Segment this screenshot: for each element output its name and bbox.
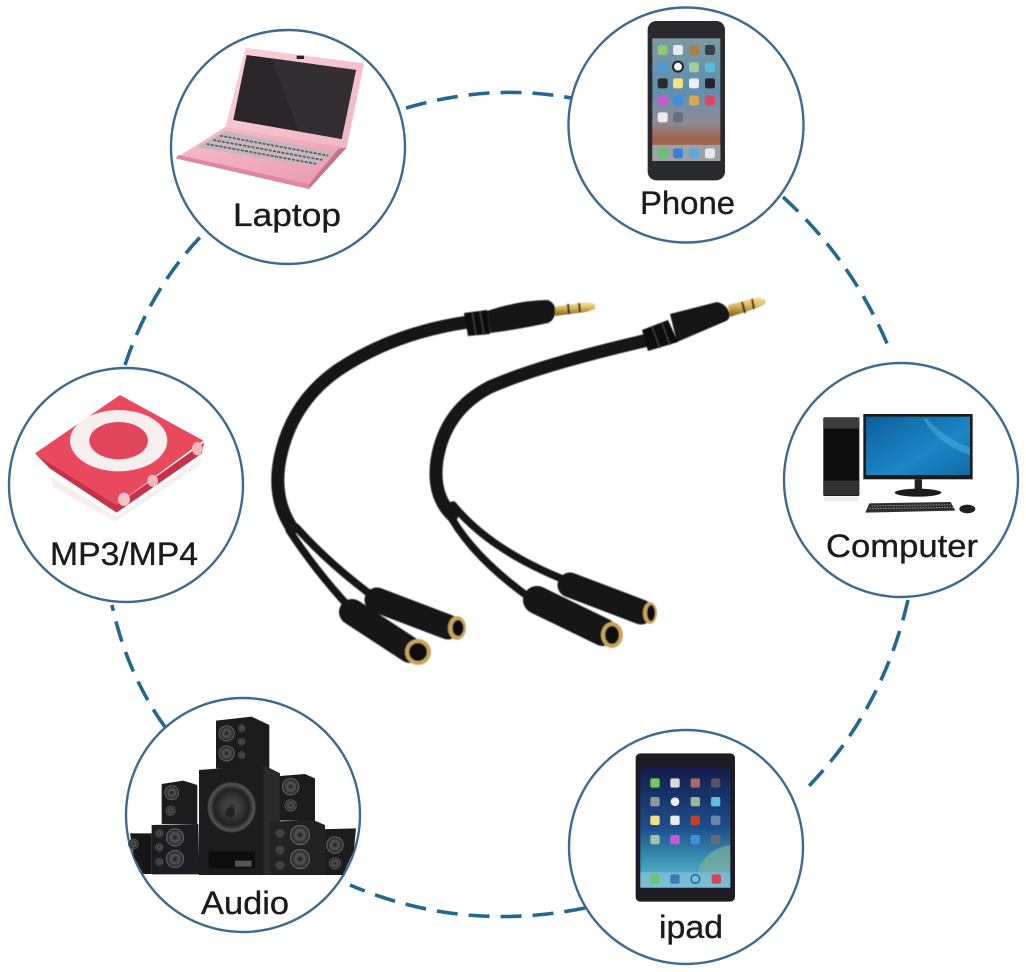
dual jack: upper <box>570 585 657 624</box>
icon: tablet <box>636 753 735 902</box>
3.5mm plug <box>464 300 595 336</box>
3.5mm plug <box>642 297 766 351</box>
label: MP3/MP4: MP3/MP4 <box>50 536 198 572</box>
dual jack: upper <box>377 600 466 640</box>
panel: Phone <box>568 8 804 242</box>
icon: red music player <box>35 395 204 522</box>
icon: desktop computer <box>823 414 975 513</box>
dashed connector ring <box>112 92 908 917</box>
label: ipad: ipad <box>659 909 723 945</box>
icon: smartphone <box>648 21 725 180</box>
panel: Computer <box>784 363 1018 597</box>
label: Laptop: Laptop <box>233 197 341 233</box>
label: Computer: Computer <box>826 528 978 564</box>
label: Audio: Audio <box>201 885 289 921</box>
icon: pink laptop <box>176 48 364 189</box>
label: Phone: Phone <box>640 185 735 221</box>
splitter cable: left <box>278 300 595 665</box>
dual jack: lower <box>352 612 431 665</box>
panel: ipad <box>569 730 803 964</box>
dual jack: lower <box>537 600 623 648</box>
panel: MP3/MP4 <box>9 368 243 602</box>
panel: Laptop <box>171 30 405 264</box>
icon: speaker system <box>128 717 356 875</box>
splitter cable: right <box>436 297 766 648</box>
panel: Audio <box>126 698 360 932</box>
